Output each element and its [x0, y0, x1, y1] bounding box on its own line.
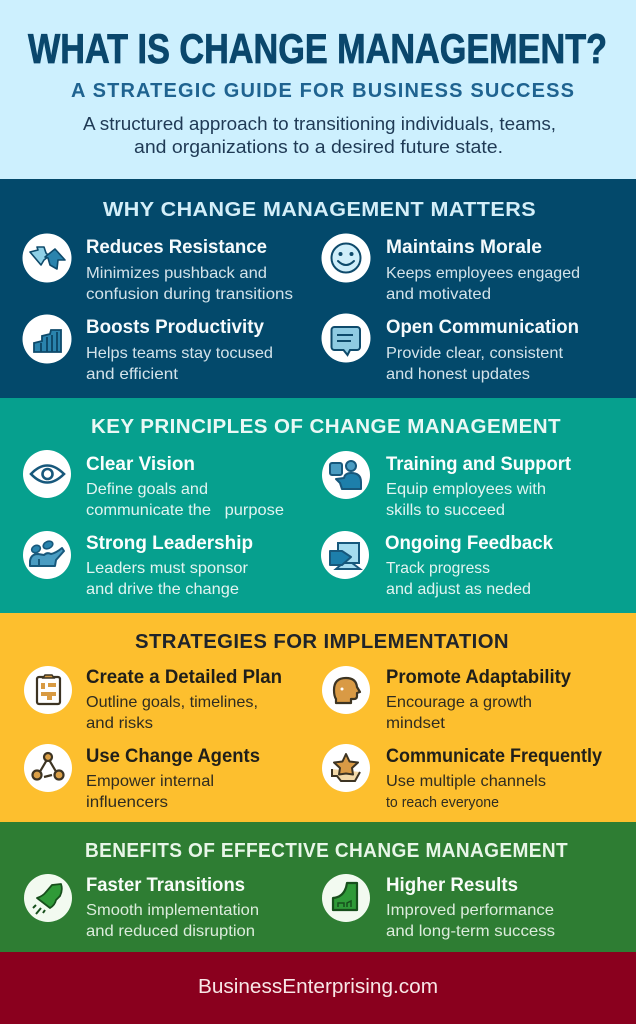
item: promote adaptability: mindset — [386, 715, 446, 732]
panel: why change management matters — [0, 179, 636, 398]
panel: footer — [0, 952, 636, 1024]
item: training and support: Training and Support — [386, 454, 572, 475]
item: open communication — [322, 314, 579, 383]
item: clear vision: Define goals and — [86, 481, 208, 498]
icon: feedback monitor — [321, 531, 369, 579]
description: A structured approach to transitioning individuals, teams, — [83, 114, 556, 134]
item: create a detailed plan: Outline goals, timelines, — [86, 694, 258, 711]
icon: smiley — [322, 234, 370, 282]
item: create a detailed plan: and risks — [86, 715, 153, 732]
panel: strategies — [0, 613, 636, 822]
heading: KEY PRINCIPLES OF CHANGE MANAGEMENT — [91, 416, 561, 438]
icon: head profile — [322, 666, 370, 714]
item: promote adaptability — [322, 666, 571, 732]
item: faster transitions: Faster Transitions — [86, 875, 245, 896]
item: strong leadership: and drive the change — [86, 581, 239, 598]
item: clear vision: communicate the purpose — [86, 502, 284, 519]
panel: benefits — [0, 822, 636, 952]
item: maintains morale: Maintains Morale — [386, 237, 542, 258]
item: communicate frequently: Communicate Frequently — [386, 746, 602, 767]
item: create a detailed plan: Create a Detailed Plan — [86, 667, 282, 688]
item: clear vision: Clear Vision — [86, 454, 195, 475]
heading: BENEFITS OF EFFECTIVE CHANGE MANAGEMENT — [85, 840, 568, 862]
subtitle: A STRATEGIC GUIDE FOR BUSINESS SUCCESS — [71, 80, 574, 102]
item: maintains morale — [322, 234, 580, 303]
item: faster transitions: Smooth implementation — [86, 902, 259, 919]
item: clear vision — [23, 450, 284, 519]
item: create a detailed plan — [24, 666, 282, 732]
item: open communication: Provide clear, consistent — [386, 345, 564, 362]
heading: STRATEGIES FOR IMPLEMENTATION — [135, 631, 509, 653]
item: promote adaptability: Promote Adaptability — [386, 667, 571, 688]
item: open communication: and honest updates — [386, 366, 530, 383]
item: reduces resistance — [22, 234, 293, 303]
item: ongoing feedback: and adjust as neded — [386, 581, 531, 598]
item: maintains morale: Keeps employees engaged — [386, 265, 580, 282]
item: promote adaptability: Encourage a growth — [386, 694, 532, 711]
item: higher results: and long-term success — [386, 923, 555, 940]
icon: network nodes — [24, 744, 72, 792]
item: communicate frequently — [322, 744, 602, 811]
icon: trainer with board — [322, 451, 370, 499]
icon: rising chart — [322, 874, 370, 922]
item: strong leadership: Strong Leadership — [86, 533, 253, 554]
heading: WHY CHANGE MANAGEMENT MATTERS — [103, 199, 536, 221]
item: maintains morale: and motivated — [386, 286, 491, 303]
item: reduces resistance: confusion during transitions — [86, 286, 293, 303]
description: and organizations to a desired future state. — [134, 137, 503, 157]
icon: opposing arrows — [22, 234, 72, 282]
item: reduces resistance: Reduces Resistance — [86, 237, 267, 258]
item: use change agents: influencers — [86, 794, 168, 811]
item: higher results: Higher Results — [386, 875, 518, 896]
item: higher results — [322, 874, 555, 940]
icon: rocket — [24, 874, 72, 922]
panel: key principles — [0, 398, 636, 613]
footer website: BusinessEnterprising.com — [198, 976, 438, 998]
item: boosts productivity: Helps teams stay tocused — [86, 345, 273, 362]
item: training and support — [322, 451, 572, 519]
icon: eye — [23, 450, 71, 498]
item: ongoing feedback: Ongoing Feedback — [385, 533, 553, 554]
icon: star in hand — [322, 744, 370, 792]
item: training and support: skills to succeed — [386, 502, 505, 519]
item: communicate frequently: Use multiple channels — [386, 773, 546, 790]
description — [83, 114, 556, 157]
item: boosts productivity — [22, 314, 273, 383]
item: strong leadership: Leaders must sponsor — [86, 560, 249, 577]
item: higher results: Improved performance — [386, 902, 554, 919]
item: use change agents: Empower internal — [86, 773, 214, 790]
item: open communication: Open Communication — [386, 317, 579, 338]
item: ongoing feedback: Track progress — [386, 560, 490, 577]
item: faster transitions: and reduced disruption — [86, 923, 255, 940]
icon: bar chart — [22, 314, 72, 364]
item: ongoing feedback — [321, 531, 553, 598]
item: boosts productivity: Boosts Productivity — [86, 317, 264, 338]
icon: group of people — [23, 531, 71, 579]
item: boosts productivity: and efficient — [86, 366, 179, 383]
item: reduces resistance: Minimizes pushback and — [86, 265, 267, 282]
item: use change agents — [24, 744, 260, 811]
item: strong leadership — [23, 531, 253, 598]
item: faster transitions — [24, 874, 259, 940]
item: use change agents: Use Change Agents — [86, 746, 260, 767]
panel: header — [0, 0, 636, 179]
icon: clipboard — [24, 666, 72, 714]
icon: speech bubble — [322, 314, 370, 362]
item: communicate frequently: to reach everyone — [386, 794, 499, 811]
item: training and support: Equip employees with — [386, 481, 546, 498]
